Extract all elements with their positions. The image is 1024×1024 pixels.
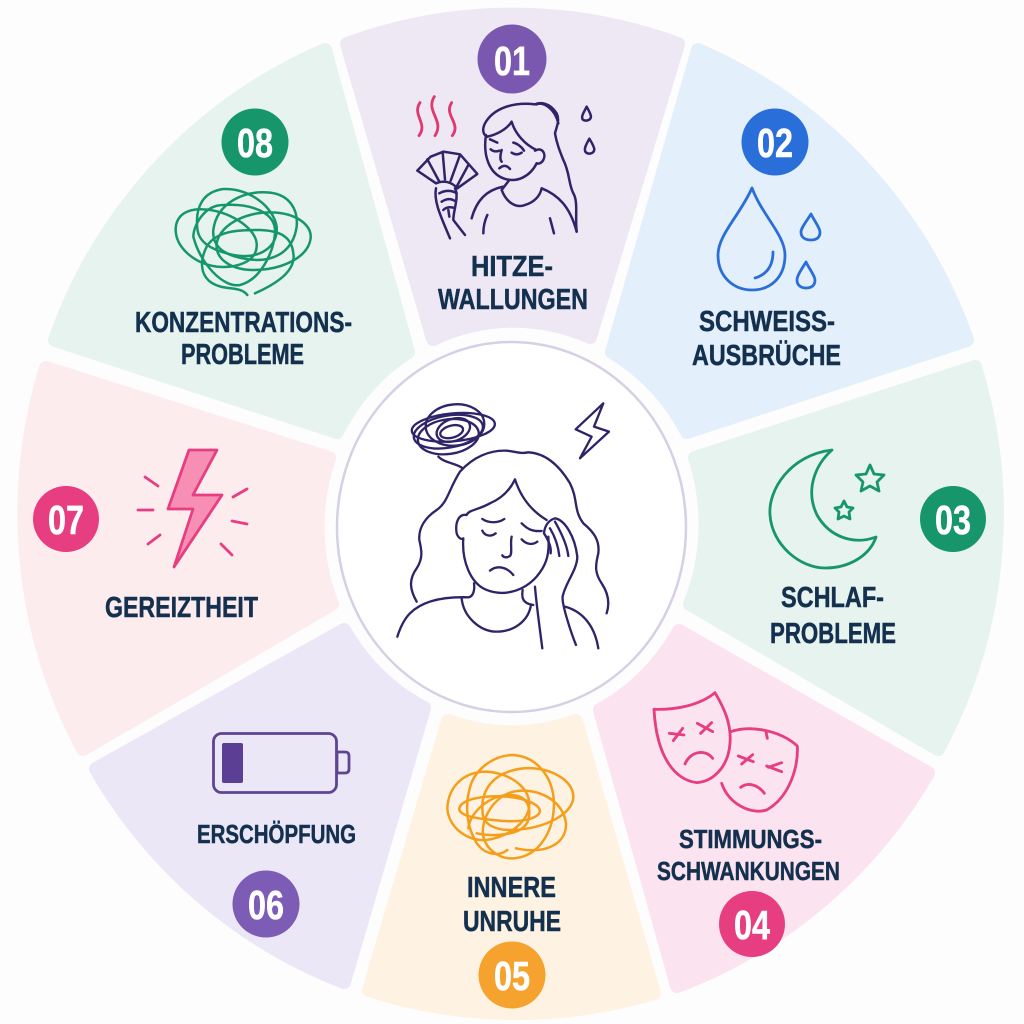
panel: 03 Schlafprobleme (690, 367, 997, 749)
body (397, 583, 598, 648)
label 02: SCHWEISS- (699, 306, 835, 338)
icon: lightning bolt with rays (138, 450, 247, 567)
badge 01: 01 (494, 38, 530, 84)
panel: 07 Gereiztheit (24, 368, 332, 749)
icon: sweat drops (718, 188, 820, 290)
badge 05 (478, 942, 546, 1008)
icon: green scribble (176, 189, 311, 295)
badge 04 (719, 891, 785, 957)
label 03 (770, 582, 896, 650)
badge 07: 07 (48, 497, 84, 543)
icon: theatre masks (654, 693, 797, 811)
face (456, 479, 549, 593)
wedge 02 (612, 50, 967, 432)
label 02: AUSBRÜCHE (692, 339, 841, 372)
badge 08: 08 (237, 120, 273, 166)
lightning bolt (576, 403, 609, 458)
label 01 (438, 251, 588, 316)
badge 05: 05 (494, 953, 530, 999)
icon: woman with fan (417, 97, 594, 238)
hair (411, 451, 608, 613)
wedge 03 (690, 367, 997, 749)
hand (535, 518, 577, 648)
icon: woman with headache (397, 402, 609, 648)
wedge 04 (600, 631, 928, 986)
label 03: SCHLAF- (781, 582, 884, 614)
label 02 (692, 306, 841, 372)
badge 01 (478, 24, 546, 94)
centre circle (337, 342, 686, 712)
label 04: SCHWANKUNGEN (657, 856, 840, 886)
badge 04: 04 (734, 902, 770, 948)
label 08: PROBLEME (181, 339, 304, 371)
wedge 05 (369, 721, 654, 1013)
label 08 (135, 307, 352, 371)
panel: centre circle with woman (337, 342, 686, 712)
label 05 (463, 872, 561, 938)
panel: 06 Erschöpfung (96, 630, 424, 982)
panel: 08 Konzentrationsprobleme (55, 50, 408, 432)
wedge 07 (24, 368, 332, 749)
icon: moon and stars (770, 450, 884, 568)
label 04 (657, 824, 840, 886)
badge 02: 02 (757, 120, 793, 166)
label 08: KONZENTRATIONS- (135, 307, 352, 339)
label 06: ERSCHÖPFUNG (197, 819, 356, 849)
label 05: INNERE (467, 872, 556, 904)
icon: orange scribble (447, 755, 573, 858)
badge 08 (222, 108, 288, 176)
panel: 05 Innere Unruhe (369, 721, 654, 1013)
panel: 04 Stimmungsschwankungen (600, 631, 928, 986)
label 01: HITZE- (471, 251, 553, 283)
badge 06 (232, 870, 300, 938)
label 01: WALLUNGEN (438, 284, 588, 316)
badge 02 (742, 108, 808, 176)
wedge 06 (96, 630, 424, 982)
icon: empty battery (214, 734, 349, 792)
badge 03: 03 (935, 497, 971, 543)
label 04: STIMMUNGS- (679, 824, 822, 854)
label 07: GEREIZTHEIT (105, 592, 258, 624)
badge 07 (33, 486, 99, 552)
panel: 01 Hitzewallungen (347, 15, 678, 339)
wedge 08 (55, 50, 408, 432)
badge 06: 06 (248, 882, 284, 928)
badge 03 (920, 486, 986, 552)
wedge 01 (347, 15, 678, 339)
panel: 02 Schweissausbrüche (612, 50, 967, 432)
scribble above head (411, 402, 496, 468)
label 05: UNRUHE (463, 906, 561, 938)
label 03: PROBLEME (770, 618, 896, 650)
